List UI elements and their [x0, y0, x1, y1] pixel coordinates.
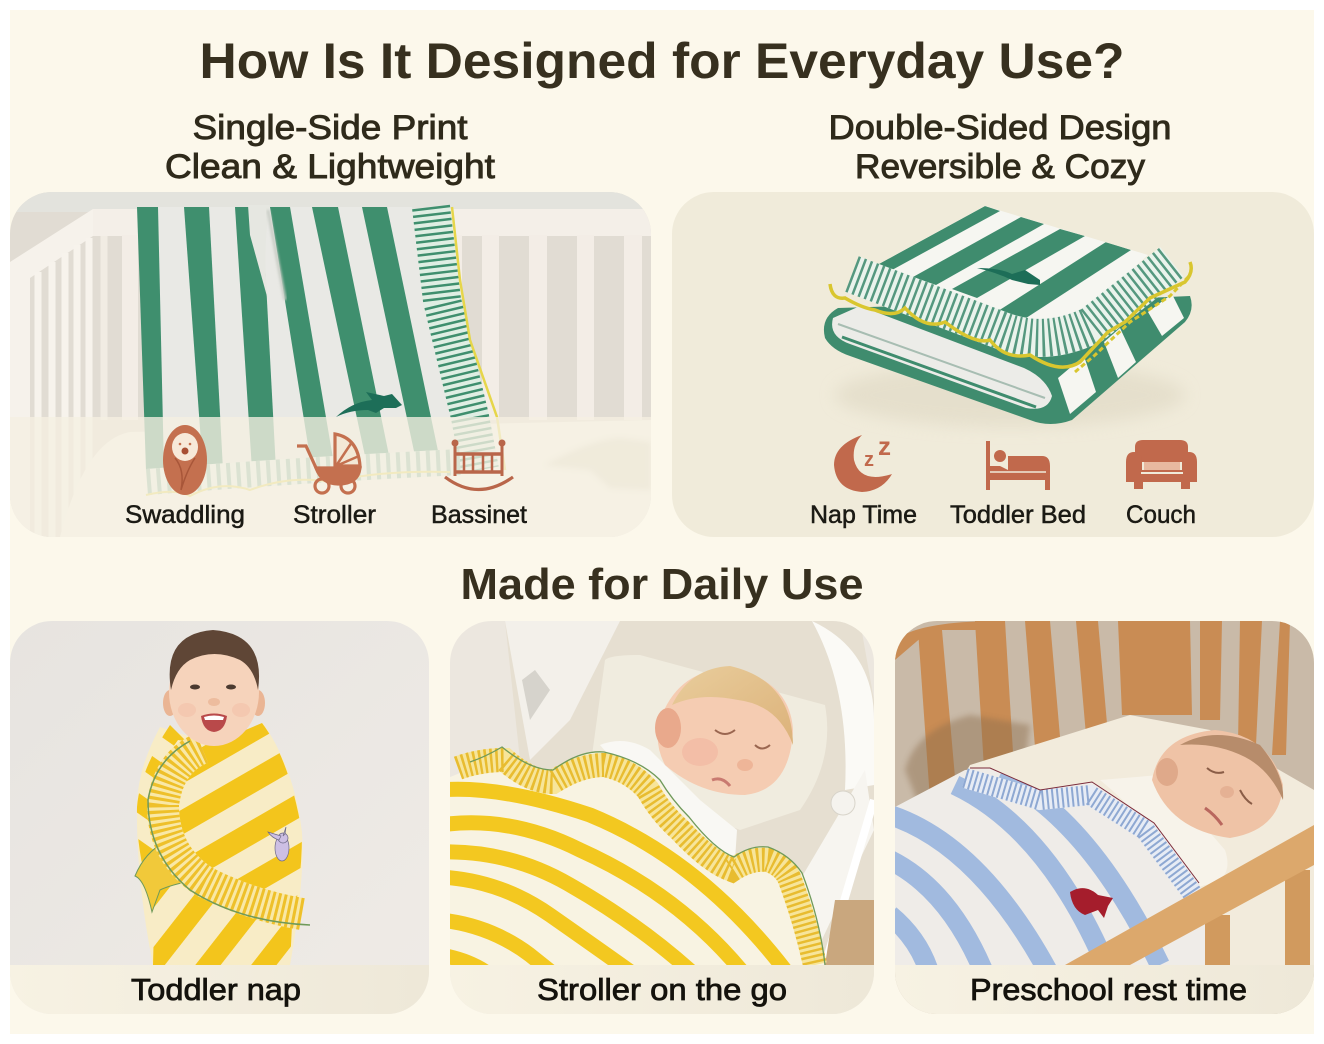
label: stroller: Stroller [293, 501, 376, 529]
sleeping baby head [1152, 730, 1283, 838]
icon: nap time [834, 431, 892, 492]
heading: single-side print [165, 109, 496, 186]
caption strip [895, 965, 1314, 1014]
folded blanket top face [879, 206, 1148, 319]
stroller canopy and cushion [505, 621, 874, 965]
caption: Preschool rest time [970, 972, 1247, 1007]
panel: stroller on the go [440, 621, 874, 1014]
heading: double-sided design: Reversible & Cozy [855, 148, 1145, 186]
crib slats [895, 621, 1290, 800]
crocodile emblem [977, 268, 1040, 285]
icon: toddler bed [986, 441, 1050, 490]
label: bassinet: Bassinet [431, 501, 527, 529]
icon: nap time: z [878, 431, 891, 461]
caption: Toddler nap [131, 972, 301, 1007]
yellow striped blanket [450, 753, 824, 965]
folded blanket shadow [842, 372, 1178, 426]
label: nap time: Nap Time [810, 501, 917, 529]
mattress [60, 420, 651, 537]
plush toy [566, 444, 646, 484]
icon: couch [1126, 440, 1197, 489]
label: couch: Couch [1126, 501, 1196, 529]
ruffle [830, 262, 1191, 372]
bunny emblem [268, 827, 289, 861]
blanket ruffle [965, 768, 1200, 905]
label: toddler bed: Toddler Bed [950, 501, 1086, 529]
swaddled body [136, 723, 302, 965]
swaddle ruffle [135, 741, 310, 925]
blanket ruffle [458, 747, 825, 965]
plane emblem [1070, 888, 1113, 918]
title: How Is It Designed for Everyday Use? [200, 33, 1124, 89]
blanket ruffle [146, 207, 505, 496]
panel: toddler nap [10, 621, 429, 1014]
foreground wood rail [1065, 825, 1314, 965]
heading: single-side print: Clean & Lightweight [165, 148, 496, 186]
panel: single-side print [10, 192, 653, 537]
label: swaddling: Swaddling [125, 501, 245, 529]
panel: preschool rest time [890, 621, 1314, 1014]
heading: single-side print: Single-Side Print [192, 109, 468, 147]
icon: bassinet [445, 441, 513, 490]
panel: double-sided design [672, 192, 1314, 537]
icon: stroller [297, 434, 360, 493]
blanket: green stripes [137, 205, 462, 480]
folded blanket stack [824, 294, 1192, 424]
sleeping baby head [655, 666, 793, 795]
caption strip [450, 965, 874, 1014]
caption: Stroller on the go [537, 972, 787, 1007]
icon: nap time: z [864, 449, 874, 471]
sleeper garment [1100, 775, 1228, 890]
onesie [600, 741, 737, 860]
caption strip [10, 965, 429, 1014]
shadow behind crib [905, 715, 1030, 820]
crocodile emblem [336, 392, 402, 417]
icon: swaddling [163, 425, 207, 495]
heading: double-sided design [828, 109, 1172, 186]
blue striped blanket [890, 760, 1230, 975]
translucent icon strip [10, 417, 651, 537]
heading: made for daily use: Made for Daily Use [460, 560, 864, 609]
mattress [895, 715, 1314, 965]
crib rail and slats [10, 209, 651, 417]
heading: double-sided design: Double-Sided Design [828, 109, 1172, 147]
baby head [163, 630, 265, 746]
